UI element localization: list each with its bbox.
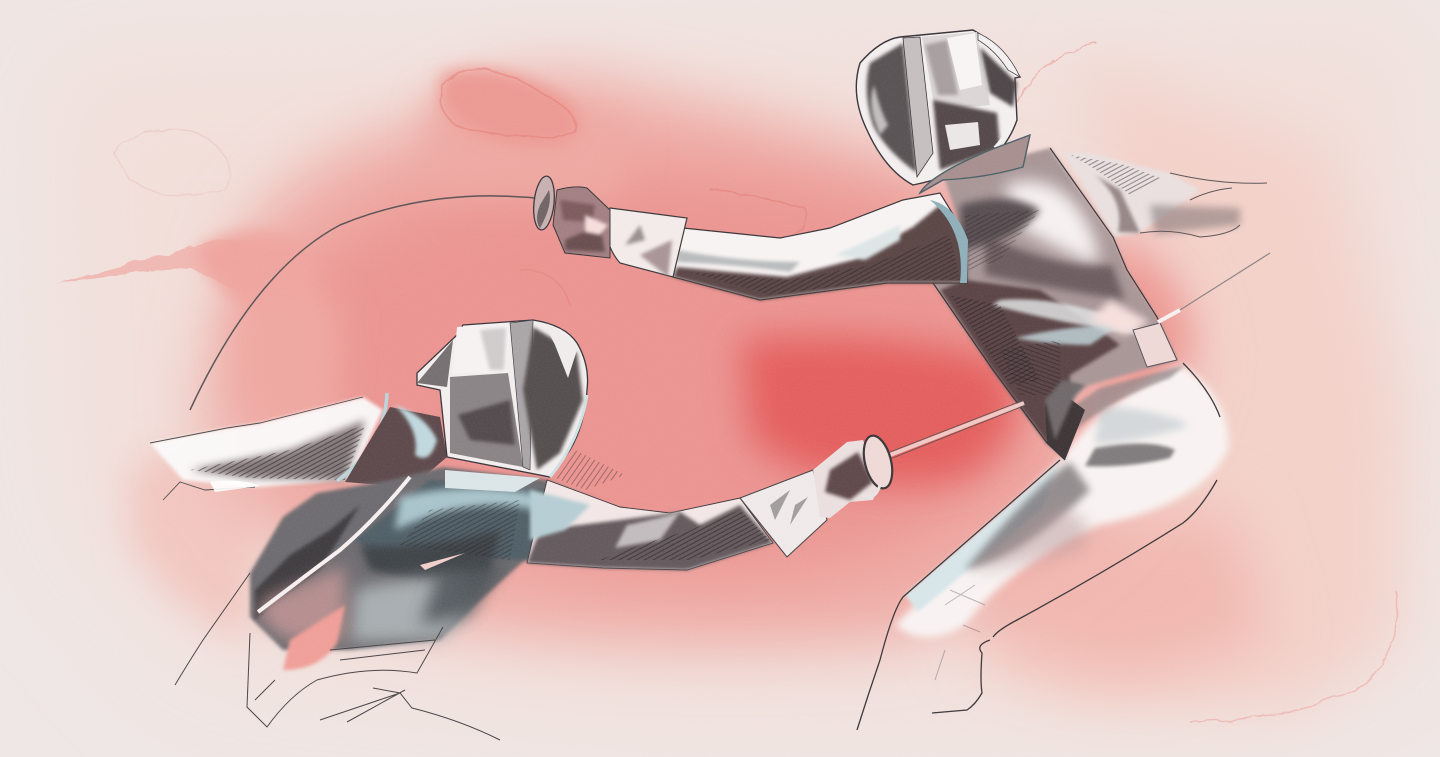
torso xyxy=(933,148,1177,460)
far sleeve hatching xyxy=(555,450,625,490)
guard xyxy=(531,175,557,231)
collar xyxy=(920,135,1030,193)
torso xyxy=(250,467,597,670)
blade from left fencer xyxy=(890,253,1270,459)
back arm xyxy=(150,393,387,500)
cuff xyxy=(740,470,827,557)
back arm xyxy=(1063,152,1267,237)
front arm xyxy=(527,480,773,570)
left fencer xyxy=(150,320,897,740)
belt xyxy=(1133,323,1177,367)
guard xyxy=(859,433,897,497)
right fencer xyxy=(531,30,1267,730)
glove xyxy=(553,187,610,258)
mask xyxy=(417,320,588,477)
glove xyxy=(813,440,880,518)
left fencer's curved blade xyxy=(190,196,535,410)
leg lines xyxy=(857,363,1220,730)
cuff xyxy=(607,208,687,277)
front arm xyxy=(673,193,968,300)
lower jacket lines xyxy=(175,573,500,740)
mask xyxy=(856,30,1020,185)
neck and bib xyxy=(345,407,447,485)
leg wash xyxy=(895,365,1228,638)
